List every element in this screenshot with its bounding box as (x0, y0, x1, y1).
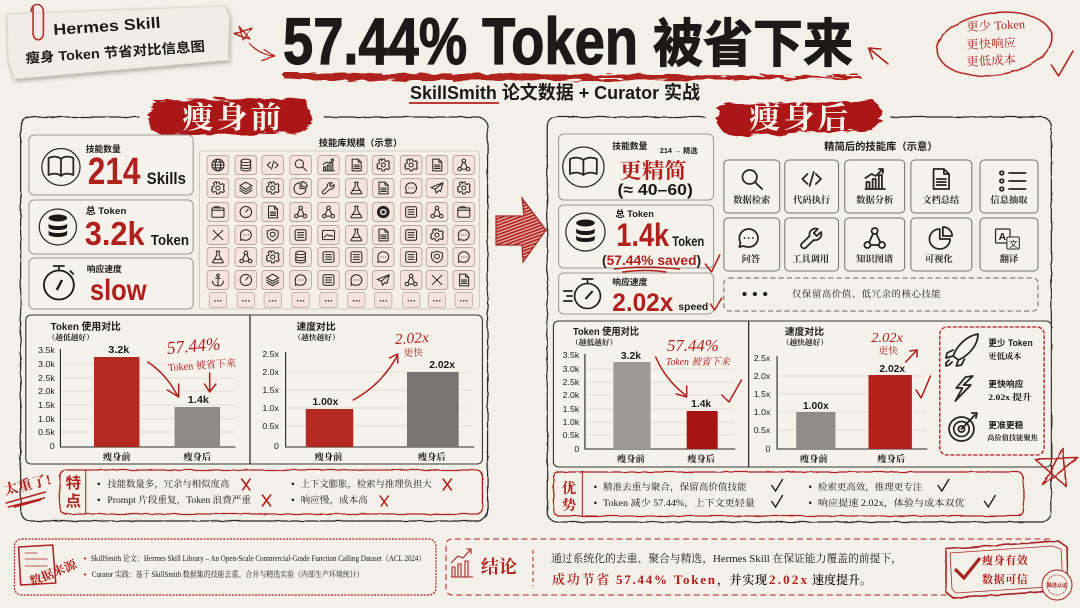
stamp: 瘦身有效 (982, 553, 1028, 567)
bar chart: speed after: （越快越好） (782, 337, 828, 347)
callout: too heavy: 太重了! (2, 470, 53, 499)
title: 57.44% Token (283, 4, 638, 78)
bar chart: speed before: 0.5x (262, 421, 280, 431)
bar chart: speed after: 1.0x (754, 407, 771, 417)
callout: features: Prompt 片段重复，Token 浪费严重 (107, 494, 251, 506)
callout: features: 技能数量多，冗余与相似度高 (107, 478, 229, 490)
card: skill count: 214 (88, 151, 141, 193)
panel: conclusion: ，并实现 (717, 572, 767, 587)
bar chart: token usage before: （越低越好） (48, 332, 94, 342)
stamp: 数据可信 (982, 572, 1028, 586)
bar chart: speed after: 速度对比 (785, 326, 824, 338)
panel: before (21, 98, 488, 521)
bar chart: token usage after: 2.5k (563, 377, 580, 387)
icon: hand drawn star (1035, 448, 1078, 487)
skill library refined: 问答 (741, 253, 760, 264)
callout: benefits: 2.02x 提升 (988, 391, 1032, 402)
card: reduced token: 总 Token (615, 208, 654, 219)
panel: data sources (14, 539, 436, 595)
card: response speed (29, 258, 193, 309)
arrow pointing to title (868, 48, 888, 64)
annotation: faster: 2.02x (394, 329, 430, 348)
callout: features: 特 (66, 474, 81, 492)
card: refined skill count: (≈ 40–60) (617, 181, 693, 199)
callout: three benefits oval (932, 5, 1073, 83)
chart panel frame: before (26, 315, 482, 464)
bar chart: speed after: 1.00x (803, 401, 829, 412)
callout: features: • (291, 495, 295, 505)
icon: check (705, 255, 720, 272)
card: response speed: 响应速度 (87, 263, 122, 274)
card: total token (29, 200, 193, 254)
callout: features: • (97, 495, 100, 505)
skill library refined (724, 140, 1038, 311)
callout: features: 上下文膨胀，检索与推理负担大 (301, 478, 432, 490)
bar chart: token usage before: 2.0k (38, 386, 55, 396)
bar chart: token usage after: （越低越好） (571, 337, 617, 347)
bar chart: token usage before: 0.5k (38, 427, 55, 437)
callout: benefits: 高价值技能聚焦 (987, 433, 1039, 442)
subtitle: SkillSmith 论文数据 + Curator 实战 (410, 82, 700, 103)
icon: growth chart (451, 549, 473, 577)
icon: bolt (955, 376, 973, 401)
chart panel frame: after (553, 321, 1051, 467)
skill library grid: 技能库规模（示意） (319, 137, 402, 148)
callout: benefits: 更快响应 (988, 378, 1024, 389)
callout: core skills only: 仅保留高价值、低冗余的核心技能 (792, 288, 941, 299)
bar chart: speed before: 2.0x (262, 367, 280, 377)
heading: after banner (717, 101, 883, 136)
skill library refined: A (999, 232, 1007, 243)
bar chart: token usage after: 1.0k (563, 417, 580, 427)
stamp (946, 541, 1072, 600)
annotation: faster: 更快 (403, 347, 423, 359)
icon: crosses (242, 479, 451, 506)
card: reduced token: Token (672, 234, 704, 250)
skill library refined: 文档总结 (922, 194, 959, 205)
annotation: token saved: 57.44% (667, 336, 719, 355)
bar chart: speed before: 1.00x (312, 397, 339, 408)
callout: features: • (97, 479, 100, 489)
card: faster response: speed (678, 302, 708, 313)
callout: features: 点 (66, 492, 81, 510)
bar chart: speed after: 瘦身前 (800, 453, 828, 464)
card: total token: 总 Token (86, 205, 126, 217)
bar chart: speed after: 2.0x (754, 371, 771, 381)
bar chart: token usage after: 1.4k (691, 399, 712, 410)
bar chart: speed before: 瘦身前 (315, 451, 342, 462)
panel: after (547, 101, 1051, 522)
panel: conclusion: 2.02x (769, 572, 808, 587)
skill library refined: 信息抽取 (990, 194, 1028, 205)
icon: checks (771, 479, 996, 507)
bar chart: token usage after: 0 (574, 444, 579, 454)
callout: advantages: Token 减少 57.44%，上下文更轻量 (603, 497, 755, 509)
callout: features: • (291, 479, 295, 489)
annotation: faster (871, 330, 930, 398)
panel: conclusion: 结论 (481, 557, 517, 577)
bar chart: speed before: 瘦身后 (418, 451, 446, 462)
icon: target (949, 413, 977, 441)
panel: conclusion (446, 539, 1050, 595)
card: response speed: slow (90, 273, 147, 307)
bar chart: speed before: 速度对比 (296, 321, 336, 333)
bar chart: token usage before: 1.0k (38, 414, 55, 424)
bar chart: token usage after: 3.5k (563, 350, 580, 360)
callout: core skills only (724, 278, 1038, 311)
icon: star and arrow to title (234, 27, 275, 60)
panel: conclusion: 速度提升。 (812, 572, 872, 587)
callout: advantages (553, 472, 1023, 516)
panel: data sources: Curator 实践：基于 SkillSmith 数据集的技能去重、合并与精选实验（内部生产环境统计） (92, 569, 364, 579)
annotation: token saved: Token 被省下来 (168, 357, 237, 374)
card: refined skill count (559, 134, 714, 200)
callout: advantages: 优 (562, 479, 576, 497)
bar chart: token usage before: 瘦身后 (183, 451, 211, 462)
icon: note pages (19, 545, 56, 585)
callout: benefits: 更准更稳 (988, 419, 1024, 430)
note: title tag: Hermes Skill (53, 15, 161, 39)
callout: advantages: 精准去重与聚合，保留高价值技能 (603, 481, 747, 493)
bar chart: speed after (754, 326, 930, 464)
arrow: before to after (496, 198, 546, 262)
bar chart: speed after: 瘦身后 (877, 453, 905, 464)
bar chart: token usage after: 瘦身后 (687, 453, 715, 464)
annotation: token saved (148, 334, 237, 397)
annotation: token saved: Token 被省下来 (666, 356, 731, 368)
annotation: token saved (656, 336, 741, 402)
card: refined skill count: 技能数量 (612, 140, 648, 151)
callout: features (60, 470, 482, 514)
callout: advantages: • (594, 482, 597, 492)
callout: three benefits oval: 更少 Token (966, 16, 1025, 34)
callout: advantages: 检索更高效，推理更专注 (818, 481, 922, 493)
card: skill count: 技能数量 (86, 143, 121, 154)
bar chart: token usage before: Token 使用对比 (51, 320, 121, 333)
panel: data sources: SkillSmith 论文：Hermes Skill Library – An Open-Scale Commercial-Grade Function Calling Dataset（ACL 2024） (91, 553, 426, 563)
card: faster response (559, 273, 722, 317)
callout: advantages: • (809, 482, 812, 492)
skill library refined: 数据检索 (733, 194, 770, 205)
panel: conclusion: 成功节省 57.44% Token (552, 572, 716, 587)
bar chart: speed after: 1.5x (754, 389, 771, 399)
skill library refined: 工具调用 (792, 253, 829, 264)
callout: benefits (940, 327, 1044, 455)
card: refined skill count: 更精简 (620, 159, 687, 183)
bar chart: token usage before: 2.5k (38, 373, 55, 383)
bar chart: token usage after: 2.0k (563, 390, 580, 400)
bar chart: speed before: 2.5x (262, 349, 280, 359)
panel: data sources: • (84, 570, 87, 579)
callout: advantages: • (809, 498, 812, 508)
skill library refined: 数据分析 (856, 194, 893, 205)
bar chart: token usage after: 3.0k (563, 364, 580, 374)
bar chart: speed before: 1.0x (262, 403, 280, 413)
icon: rocket (946, 334, 978, 366)
callout: benefits: 更低成本 (988, 351, 1021, 361)
heading: before banner: 瘦身前 (182, 101, 285, 135)
annotation: faster: 更快 (878, 345, 898, 357)
panel: data sources: 数据来源 (27, 556, 80, 589)
title: 被省下来 (653, 16, 853, 74)
panel: data sources: • (84, 554, 87, 563)
bar chart: token usage before: 3.0k (38, 359, 55, 369)
note: title tag (7, 4, 229, 79)
skill library refined: 翻译 (1000, 253, 1018, 264)
bar chart: token usage after (563, 325, 741, 464)
icon: paper clip (31, 4, 43, 40)
bar chart: speed before: 0 (274, 441, 279, 451)
card: reduced token: (57.44% saved) (602, 253, 701, 268)
card: reduced token (559, 205, 720, 272)
bar chart: token usage after: Token 使用对比 (573, 325, 639, 338)
note: title tag: 瘦身 Token 节省对比信息图 (25, 38, 205, 66)
skill library refined: 精简后的技能库（示意） (824, 140, 938, 153)
bar chart: speed after: 0 (765, 444, 771, 454)
card: total token: 3.2k (85, 216, 145, 253)
card: skill count (29, 135, 193, 195)
bar chart: token usage after: 0.5k (563, 430, 580, 440)
bar chart: token usage before: 3.5k (38, 345, 55, 355)
bar chart: token usage before: 1.5k (38, 400, 55, 410)
bar chart: token usage after: 1.5k (563, 404, 580, 414)
callout: features: 响应慢，成本高 (301, 494, 368, 506)
bar chart: speed after: 2.02x (879, 364, 906, 375)
callout: advantages: • (594, 498, 597, 508)
panel: conclusion: 通过系统化的去重、聚合与精选，Hermes Skill 在保证能力覆盖的前提下， (551, 551, 902, 565)
callout: three benefits oval: 更低成本 (966, 52, 1016, 69)
card: reduced token: 1.4k (616, 217, 670, 253)
bar chart: token usage after: 瘦身前 (617, 453, 645, 464)
icon: round seal: 精选认证 (1047, 582, 1067, 589)
bar chart: token usage after: 3.2k (621, 351, 641, 362)
card: faster response: 2.02x (612, 289, 673, 317)
icon: check (710, 298, 722, 310)
skill library refined: 知识图谱 (856, 253, 893, 264)
title underline brush (283, 73, 863, 81)
callout: advantages: 响应提速 2.02x，体验与成本双优 (818, 497, 965, 509)
bar chart: speed before (262, 321, 474, 462)
annotation: faster (353, 329, 430, 400)
skill library refined: 文 (1009, 238, 1018, 249)
bar chart: speed after: 2.5x (754, 353, 771, 363)
skill library refined: 可视化 (925, 253, 953, 264)
bar chart: speed before: （越快越好） (293, 332, 340, 342)
bar chart: speed before: 1.5x (262, 385, 280, 395)
bar chart: token usage before: 0 (50, 441, 55, 451)
card: total token: Token (151, 232, 189, 249)
card: faster response: 响应速度 (612, 276, 648, 287)
bar chart: token usage before: 3.2k (108, 344, 129, 356)
annotation: token saved: 57.44% (166, 334, 221, 358)
annotation: faster: 2.02x (871, 330, 904, 346)
callout: advantages: 势 (562, 496, 576, 514)
heading: after banner: 瘦身后 (749, 101, 851, 135)
heading: before banner (149, 98, 313, 135)
bar chart: token usage before (38, 320, 237, 462)
skill library grid (199, 137, 479, 309)
bar chart: speed after: 0.5x (754, 425, 771, 435)
callout: three benefits oval: 更快响应 (966, 35, 1016, 52)
bar chart: speed before: 2.02x (429, 360, 455, 371)
bar chart: token usage before: 瘦身前 (103, 451, 131, 462)
callout: benefits: 更少 Token (988, 338, 1033, 348)
skill library refined: 代码执行 (793, 194, 830, 205)
icon: check (1051, 51, 1073, 76)
card: skill count: Skills (147, 168, 186, 188)
card: refined skill count: 214 → 精选 (660, 146, 698, 155)
bar chart: token usage before: 1.4k (188, 394, 209, 406)
